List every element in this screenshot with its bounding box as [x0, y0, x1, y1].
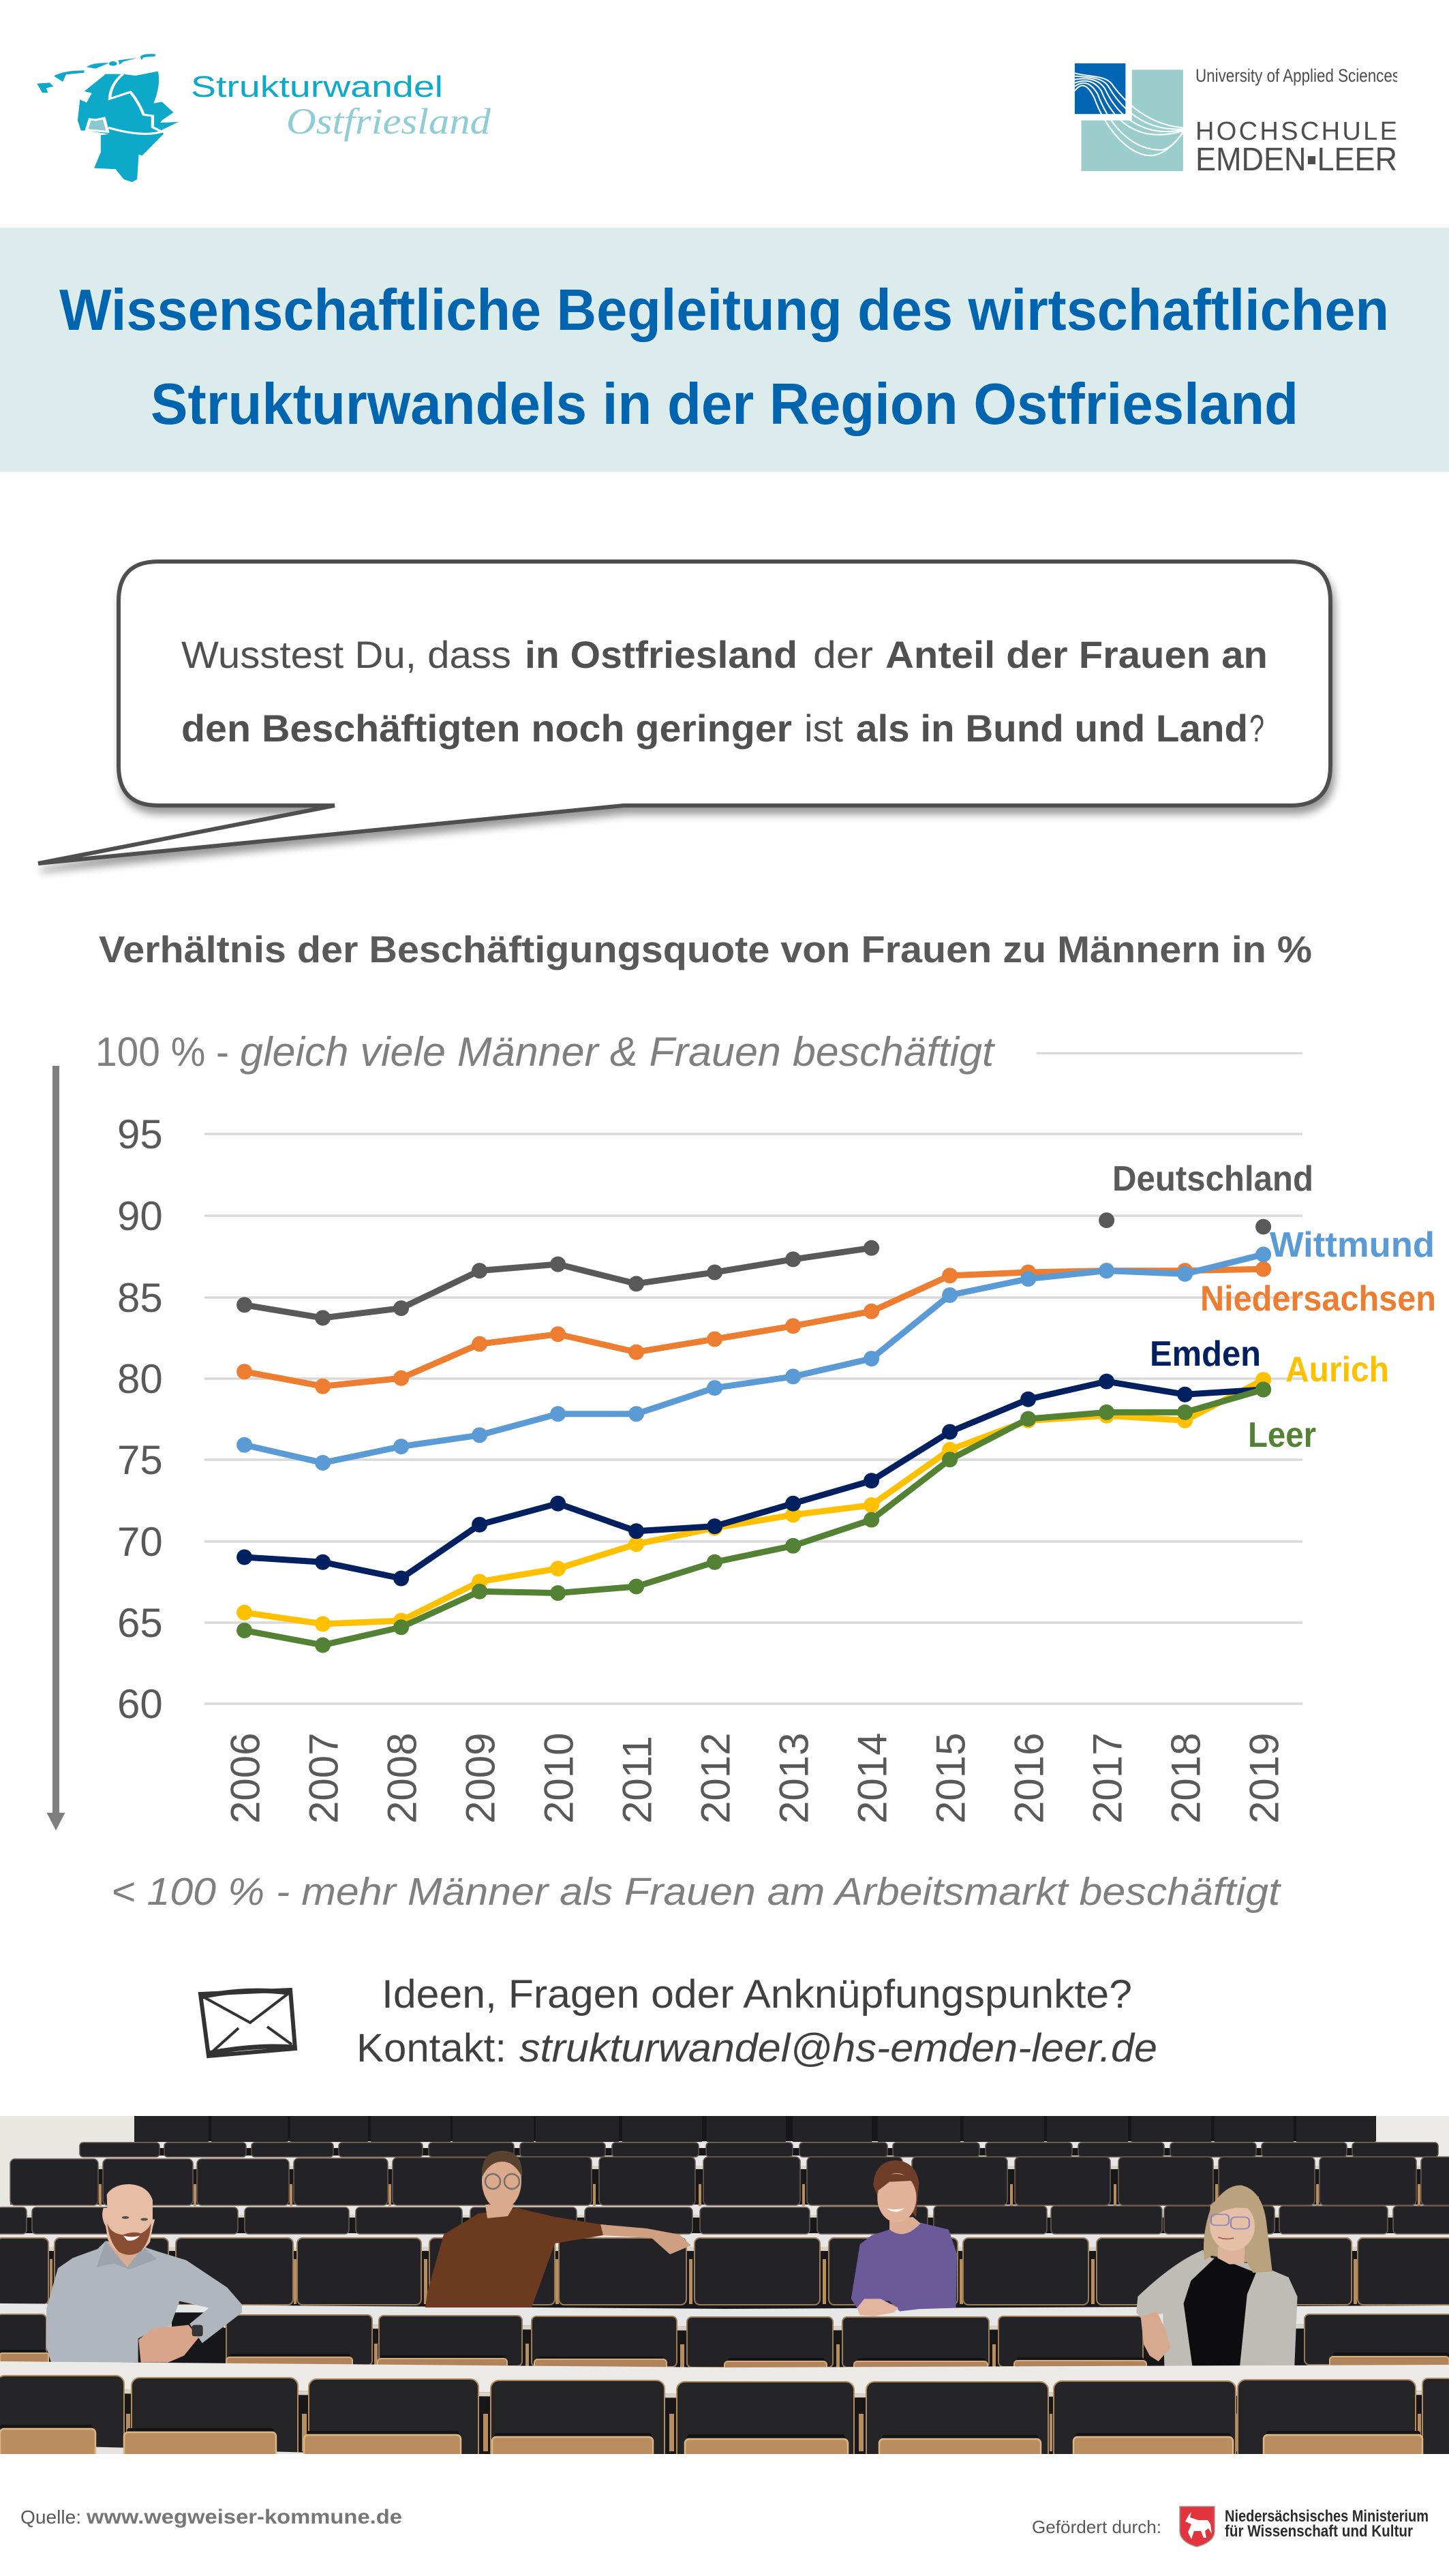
text: 100 percent line [95, 1029, 1302, 1075]
x axis labels: 2011 [615, 1736, 660, 1824]
y axis labels: 75 [117, 1437, 163, 1483]
ministry name [1225, 2507, 1429, 2541]
series labels: Leer [1248, 1415, 1316, 1455]
y axis labels: 90 [117, 1193, 163, 1239]
text: contact: Kontakt: [356, 2026, 506, 2070]
callout text [181, 633, 1268, 750]
x axis labels: 2019 [1242, 1733, 1287, 1824]
panel: title band [0, 228, 1449, 472]
x axis labels: 2014 [850, 1733, 896, 1824]
x axis labels [223, 1733, 1287, 1824]
table row 2 [0, 2303, 1449, 2327]
callout text: in Ostfriesland [525, 633, 797, 676]
callout text: ? [1249, 707, 1264, 750]
person: woman in grey cardigan [1136, 2186, 1298, 2367]
x axis labels: 2016 [1007, 1733, 1052, 1824]
x axis labels: 2010 [536, 1733, 582, 1824]
logo text: Hochschule: HOCHSCHULE [1195, 117, 1397, 146]
x axis labels: 2012 [693, 1733, 739, 1824]
person: man in grey shirt [46, 2184, 242, 2363]
x axis labels: 2007 [301, 1733, 347, 1824]
logo: Hochschule Emden-Leer [1075, 63, 1400, 178]
y axis labels: 60 [117, 1681, 163, 1727]
x axis labels: 2018 [1163, 1733, 1209, 1824]
series: Wittmund [237, 1246, 1271, 1471]
arrow: scale direction [46, 1066, 65, 1830]
series labels: Emden [1150, 1334, 1261, 1374]
x axis labels: 2015 [928, 1733, 974, 1824]
text: source: www.wegweiser-kommune.de [86, 2506, 402, 2528]
text: below 100 percent note: < 100 % - mehr Männer als Frauen am Arbeitsmarkt beschäftigt [111, 1870, 1281, 1914]
y axis labels: 65 [117, 1600, 163, 1646]
text: contact [356, 1972, 1157, 2070]
photo: team in lecture hall [0, 2116, 1449, 2464]
callout text: Anteil der Frauen an [885, 633, 1268, 676]
y axis labels [117, 1111, 163, 1727]
ministry name: für Wissenschaft und Kultur [1225, 2522, 1413, 2541]
logo: Strukturwandel Ostfriesland [37, 54, 491, 182]
icon: university square mark [1075, 63, 1183, 171]
series labels: Wittmund [1270, 1225, 1435, 1265]
x axis labels: 2006 [223, 1733, 269, 1824]
x axis labels: 2008 [380, 1733, 425, 1824]
callout: speech bubble [38, 562, 1330, 863]
icon: map of Ostfriesland [37, 54, 179, 182]
callout text: als in Bund und Land [856, 707, 1248, 750]
y axis labels: 70 [117, 1519, 163, 1565]
x axis labels: 2013 [772, 1733, 817, 1824]
callout text: Wusstest Du, dass [181, 633, 511, 676]
logo text: University of Applied Sciences: University of Applied Sciences [1195, 65, 1400, 86]
heading: chart title: Verhältnis der Beschäftigungsquote von Frauen zu Männern in % [99, 928, 1312, 970]
logo text: Emden-Leer: EMDEN▪LEER [1195, 142, 1397, 178]
series labels: Aurich [1285, 1350, 1389, 1390]
icon: Lower Saxony crest [1180, 2506, 1215, 2547]
icon: envelope [200, 1990, 295, 2056]
callout text: der [813, 633, 873, 676]
line chart [117, 1111, 1436, 1824]
table row 3 [0, 2361, 1449, 2394]
series labels [1112, 1159, 1436, 1455]
series: Aurich [237, 1372, 1271, 1631]
text: funded by: Gefördert durch: [1032, 2517, 1161, 2537]
series: Deutschland [237, 1212, 1271, 1325]
y axis labels: 95 [117, 1111, 163, 1157]
x axis labels: 2017 [1085, 1733, 1131, 1824]
logo: Niedersachsen ministry [1180, 2506, 1429, 2547]
person: woman in purple [851, 2160, 957, 2316]
person: man in brown sweater [425, 2151, 691, 2307]
text: contact: strukturwandel@hs-emden-leer.de [519, 2026, 1157, 2070]
text: 100 percent line: gleich viele Männer & Frauen beschäftigt [240, 1029, 995, 1075]
y axis labels: 80 [117, 1356, 163, 1402]
logo wordmark: Strukturwandel [191, 70, 443, 104]
title line 2: Strukturwandels in der Region Ostfriesland [151, 372, 1298, 437]
series: Leer [237, 1382, 1271, 1653]
title line 1: Wissenschaftliche Begleitung des wirtschaftlichen [59, 278, 1389, 343]
text: 100 percent line: 100 % - [95, 1029, 229, 1075]
y axis labels: 85 [117, 1275, 163, 1321]
text: source: Quelle: [20, 2506, 81, 2528]
logo script line: Ostfriesland [286, 101, 491, 142]
series labels: Niedersachsen [1200, 1279, 1436, 1319]
callout text: den Beschäftigten noch geringer [181, 707, 792, 750]
text: contact: Ideen, Fragen oder Anknüpfungspunkte? [382, 1972, 1132, 2017]
series labels: Deutschland [1112, 1159, 1313, 1199]
x axis labels: 2009 [458, 1733, 504, 1824]
series: Emden [237, 1374, 1271, 1586]
series: Niedersachsen [237, 1261, 1271, 1394]
photo bottom edge mask [0, 2454, 1449, 2464]
callout text: ist [804, 707, 843, 750]
